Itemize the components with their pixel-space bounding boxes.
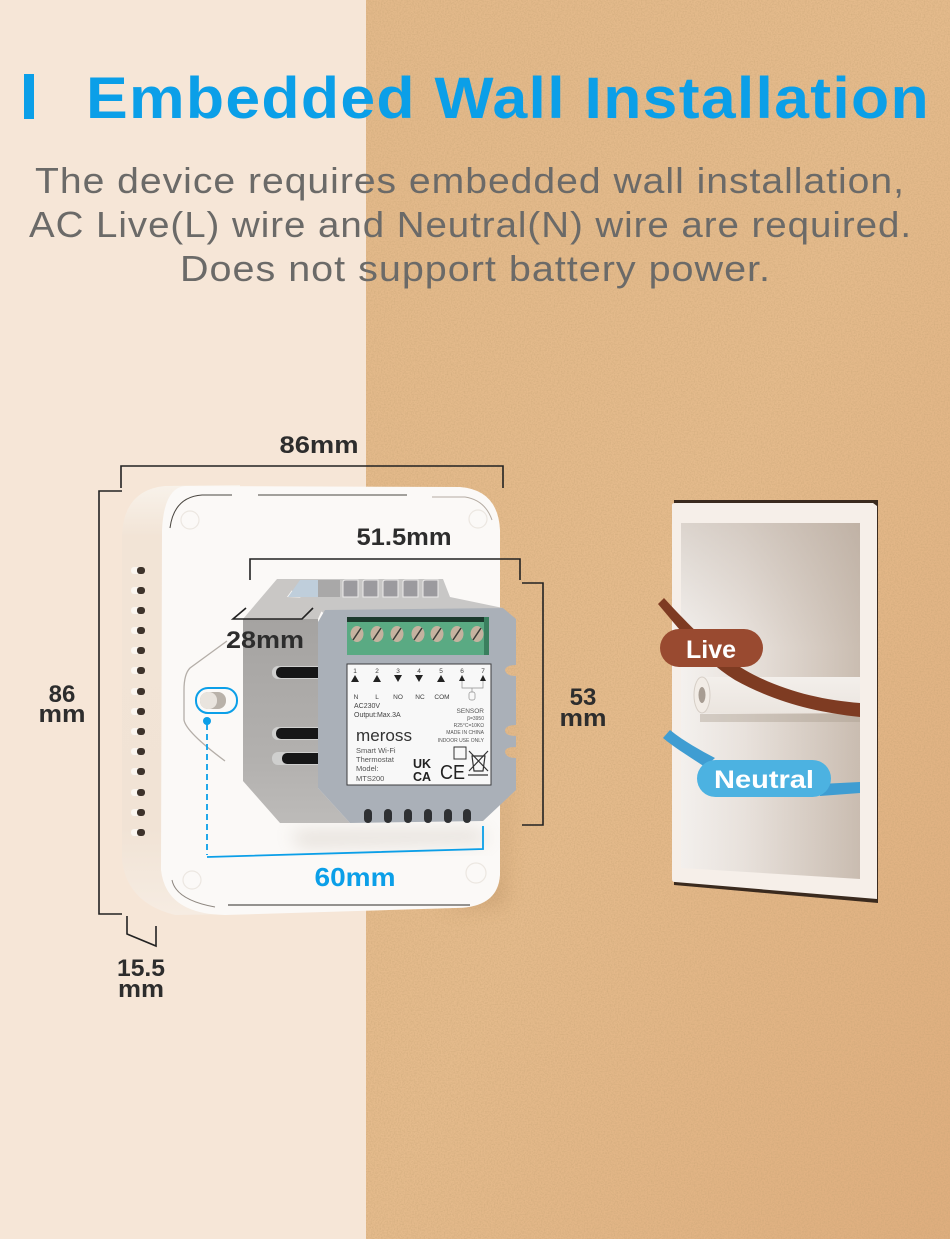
product label: NC <box>415 694 425 701</box>
box interior <box>681 523 860 879</box>
mounting slot <box>200 692 226 709</box>
product label: 1 <box>353 668 357 675</box>
product label <box>347 664 491 785</box>
product label: 3 <box>396 668 400 675</box>
product label: β=3950 <box>467 716 484 722</box>
product label: UK <box>413 757 431 771</box>
dimension labels: mm <box>38 701 86 728</box>
module recess grey <box>318 580 340 597</box>
product label: MTS200 <box>356 774 384 783</box>
product label: Smart Wi-Fi <box>356 746 396 755</box>
blue-grey top highlight <box>288 580 318 597</box>
module left face <box>243 619 350 823</box>
product label: Model: <box>356 764 379 773</box>
product label: L <box>375 694 379 701</box>
product label: 6 <box>460 668 464 675</box>
product label: 5 <box>439 668 443 675</box>
product label: COM <box>434 694 450 701</box>
product label: CE <box>440 762 465 784</box>
live label: Live <box>686 636 736 664</box>
module shadow <box>290 830 488 846</box>
product label: 4 <box>417 668 421 675</box>
product label: NO <box>393 694 403 701</box>
60mm blue dimension: 60mm <box>314 862 396 892</box>
box frame <box>672 503 877 899</box>
module left face top <box>243 579 322 619</box>
dimension labels: mm <box>560 705 606 732</box>
dimension labels: 15.5 <box>117 955 165 982</box>
live label <box>660 629 763 667</box>
dimension labels: 53 <box>570 684 596 711</box>
side slots <box>272 666 332 765</box>
description text: The device requires embedded wall installation, <box>35 160 905 201</box>
recess shadow lines <box>674 500 878 903</box>
dimension labels: 28mm <box>226 627 304 654</box>
bottom notches <box>364 809 471 823</box>
module top fins <box>277 579 503 614</box>
dimension brackets <box>99 466 543 946</box>
wall junction box <box>658 500 878 903</box>
product label: Thermostat <box>356 755 395 764</box>
product label: 2 <box>375 668 379 675</box>
description text: AC Live(L) wire and Neutral(N) wire are required. <box>29 204 912 245</box>
60mm blue dimension <box>196 688 483 892</box>
title accent bar <box>24 74 34 119</box>
product label: N <box>354 694 359 701</box>
neutral label: Neutral <box>714 766 814 794</box>
plate shadow <box>440 700 510 910</box>
background: left cream panel <box>0 0 366 1239</box>
description text: Does not support battery power. <box>180 248 771 289</box>
dimension labels: 51.5mm <box>356 524 452 551</box>
neutral label <box>697 760 831 797</box>
product label: AC230V <box>354 703 380 710</box>
module front plate <box>318 608 516 823</box>
conduit tube <box>694 677 860 722</box>
product label: 7 <box>481 668 485 675</box>
dimension labels: mm <box>118 976 164 1003</box>
terminal block <box>347 617 489 655</box>
plate side wall <box>122 485 240 915</box>
description text <box>29 160 912 289</box>
relay module <box>243 579 516 846</box>
product label: meross <box>356 726 412 745</box>
vent holes <box>131 567 145 836</box>
plate edge lines <box>170 495 492 907</box>
background: textured wall <box>366 0 950 1239</box>
live wire <box>658 598 860 717</box>
product label: INDOOR USE ONLY <box>438 738 485 744</box>
title: Embedded Wall Installation <box>86 66 930 131</box>
product label: CA <box>413 770 431 784</box>
product label: Output:Max.3A <box>354 712 401 719</box>
thermostat back plate <box>122 485 510 915</box>
fin slots <box>343 580 438 597</box>
neutral wire <box>663 730 860 796</box>
spring clip <box>184 641 227 761</box>
product label: SENSOR <box>457 708 484 715</box>
product label: R25°C=10KΩ <box>454 723 484 729</box>
dimension labels: 86 <box>49 681 75 708</box>
dimension labels <box>38 432 606 1003</box>
plate face <box>161 486 500 915</box>
product label: MADE IN CHINA <box>446 730 485 736</box>
dimension labels: 86mm <box>280 432 358 459</box>
corner screw marks <box>181 510 487 889</box>
